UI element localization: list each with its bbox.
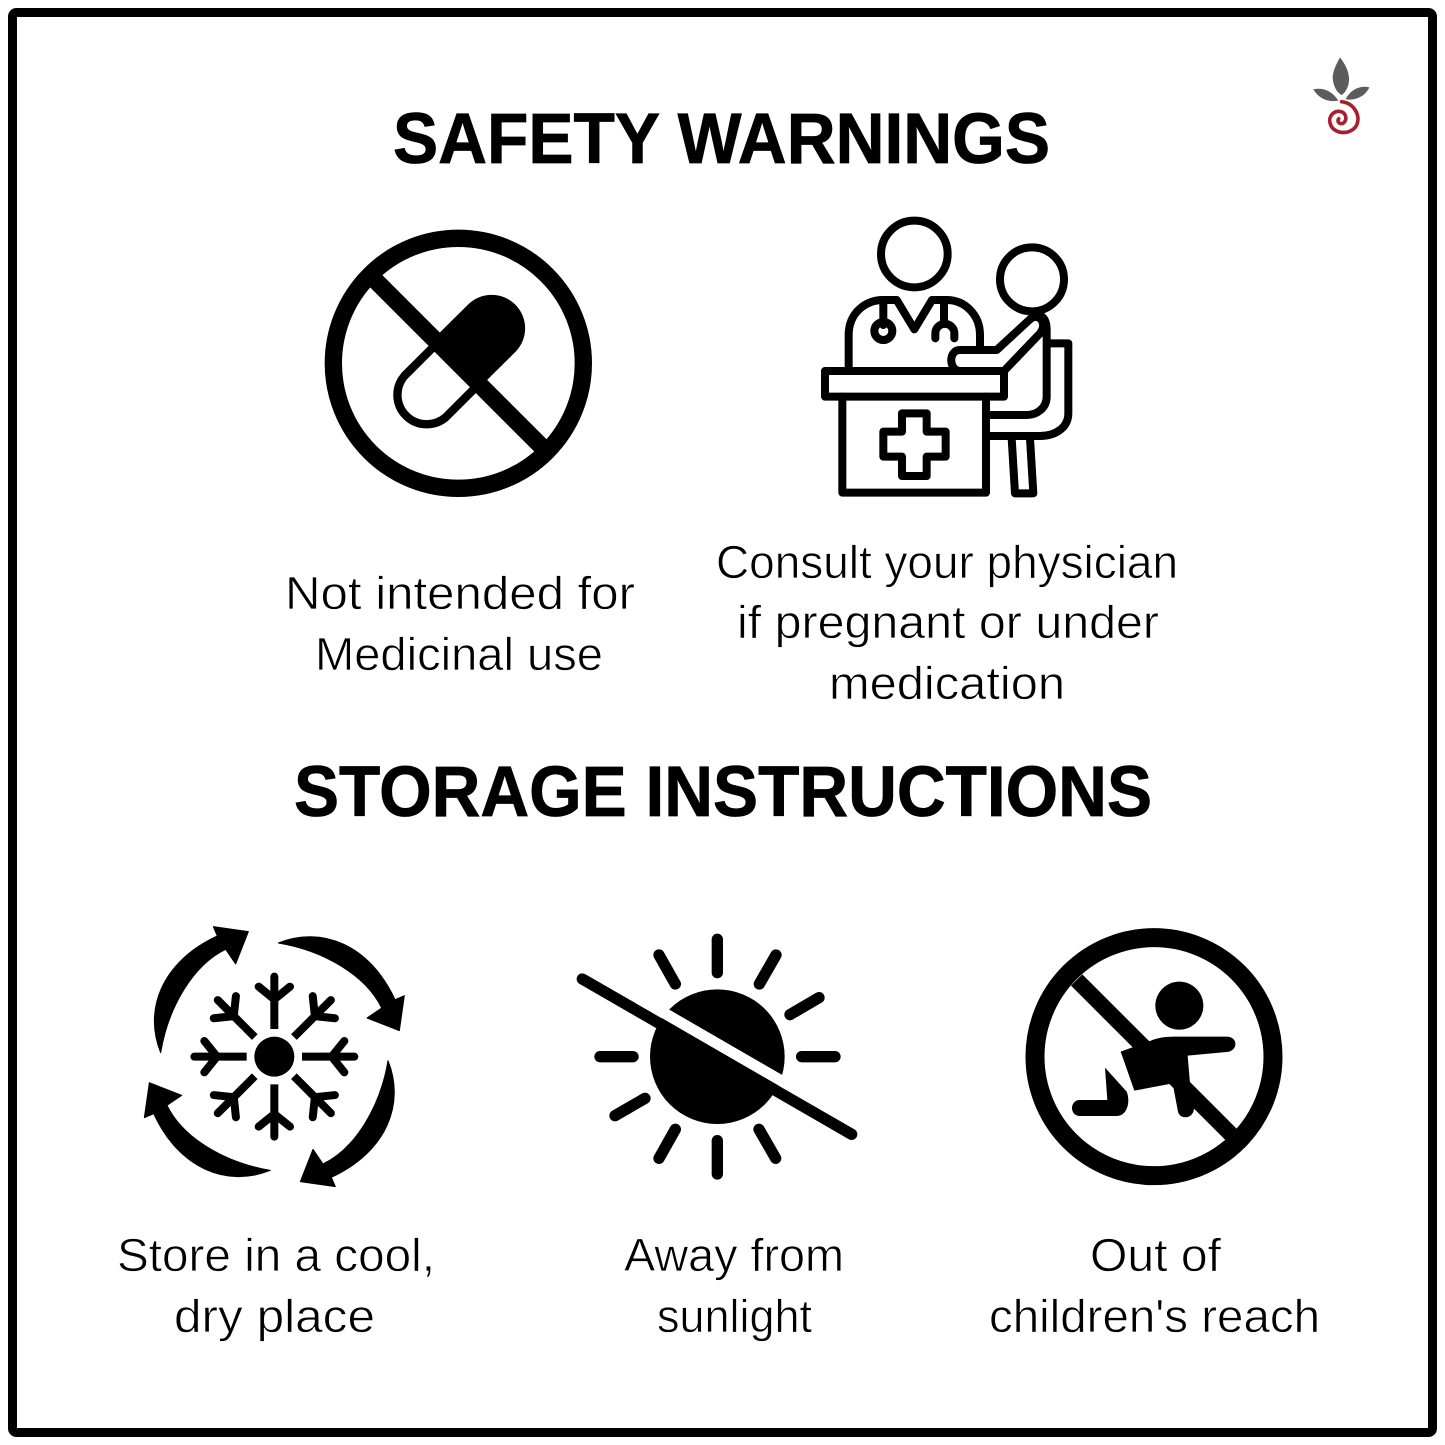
text: not intended for medicinal use: Not intended for: [285, 567, 635, 619]
text: consult your physician: Consult your physician: [716, 536, 1178, 588]
text: consult your physician: [716, 536, 1178, 709]
text: away from sunlight: [624, 1229, 844, 1342]
icon: brand logo leaves and spiral: [1313, 57, 1369, 132]
heading: storage instructions: STORAGE INSTRUCTIONS: [294, 753, 1152, 832]
text: out of children's reach: Out of: [1090, 1229, 1221, 1281]
text: out of children's reach: [989, 1229, 1320, 1342]
text: not intended for medicinal use: [285, 567, 635, 680]
icon: keep away from children: [1035, 938, 1273, 1176]
text: store in a cool dry place: dry place: [174, 1290, 375, 1342]
text: away from sunlight: Away from: [624, 1229, 844, 1281]
icon: snowflake with circular arrows: [144, 927, 404, 1187]
text: not intended for medicinal use: Medicinal use: [315, 628, 603, 680]
text: consult your physician: medication: [829, 657, 1065, 709]
heading: safety warnings: SAFETY WARNINGS: [393, 100, 1050, 179]
text: away from sunlight: sunlight: [657, 1290, 812, 1342]
icon: no sunlight: [582, 939, 852, 1174]
text: out of children's reach: children's reach: [989, 1290, 1320, 1342]
text: store in a cool dry place: Store in a cool,: [117, 1229, 435, 1281]
icon: doctor consultation: [825, 221, 1068, 493]
text: consult your physician: if pregnant or under: [737, 596, 1159, 648]
text: store in a cool dry place: [117, 1229, 435, 1342]
icon: no pills: [333, 238, 583, 488]
